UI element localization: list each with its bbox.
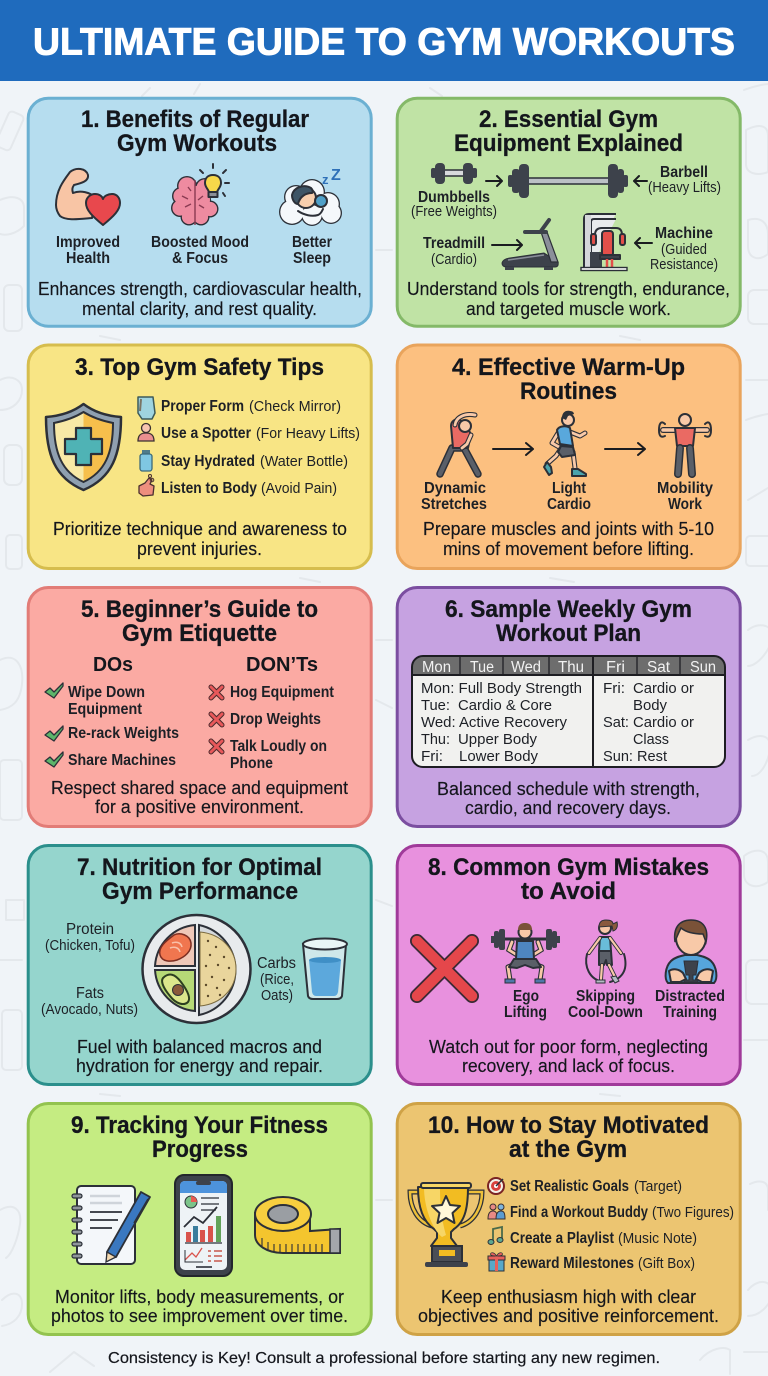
- list: don'ts: Hog Equipment: [230, 684, 334, 701]
- list: dos: Re-rack Weights: [68, 725, 179, 742]
- panel: 6 weekly plan: [397, 588, 740, 826]
- label: carbs: [257, 955, 296, 1004]
- text: etiquette summary: for a positive environment.: [95, 797, 304, 817]
- heading: motivation: at the Gym: [509, 1136, 627, 1163]
- icon: flexed arm with heart: [56, 169, 120, 225]
- label: protein: (Chicken, Tofu): [45, 937, 135, 954]
- label: dumbbells: (Free Weights): [411, 203, 497, 220]
- table: weekly schedule: Tue: [470, 659, 494, 676]
- list: motivation tips: (Music Note): [618, 1230, 697, 1247]
- text: warm-up summary: mins of movement before lifting.: [443, 539, 694, 559]
- panel: 4 warm-up: [397, 345, 740, 568]
- zZ letters: z: [322, 172, 329, 187]
- label: machine: [650, 225, 718, 273]
- heading: weekly plan: Workout Plan: [496, 620, 641, 647]
- panel: 7 nutrition: [28, 846, 371, 1084]
- icon: notebook and pen: [72, 1186, 150, 1264]
- text: benefits summary: mental clarity, and rest quality.: [82, 299, 317, 319]
- table: weekly schedule: Sat: [647, 659, 671, 676]
- icon: trophy: [410, 1183, 482, 1267]
- text: motivation summary: objectives and positive reinforcement.: [418, 1306, 719, 1326]
- labels: mistakes: Skipping: [576, 988, 635, 1005]
- text: plan summary: cardio, and recovery days.: [465, 798, 671, 818]
- list: safety tips: [138, 397, 360, 497]
- table: weekly schedule: Class: [633, 731, 669, 748]
- heading: benefits: Gym Workouts: [117, 130, 277, 157]
- labels: benefits: Better: [292, 234, 332, 251]
- label: carbs: Oats): [261, 987, 293, 1004]
- icon: two figures: [488, 1204, 505, 1219]
- heading: nutrition: [77, 854, 322, 905]
- labels: mistakes: Training: [663, 1004, 717, 1021]
- icon: shield with cross: [46, 404, 121, 490]
- list: motivation tips: Create a Playlist: [510, 1230, 614, 1247]
- heading: weekly plan: 6. Sample Weekly Gym: [445, 596, 692, 623]
- arrow: machine: [635, 238, 652, 248]
- icon: glass of water: [303, 938, 347, 999]
- list: don'ts: Drop Weights: [230, 711, 321, 728]
- table: weekly schedule: Tue:: [421, 697, 450, 714]
- heading: benefits: 1. Benefits of Regular: [81, 106, 309, 133]
- table: weekly schedule: Wed: [511, 659, 541, 676]
- text: nutrition summary: Fuel with balanced macros and: [77, 1037, 322, 1057]
- footer note: Consistency is Key! Consult a professional before starting any new regimen.: [108, 1350, 660, 1367]
- panel: 3 safety: [28, 345, 371, 568]
- title: ULTIMATE GUIDE TO GYM WORKOUTS: [33, 22, 735, 64]
- table: weekly schedule: Fri:: [421, 748, 443, 765]
- labels: benefits: Improved: [56, 234, 120, 251]
- text: tracking summary: photos to see improvement over time.: [51, 1306, 348, 1326]
- table: weekly schedule: Fri:: [603, 680, 625, 697]
- list: motivation tips: Find a Workout Buddy: [510, 1204, 648, 1221]
- text: mistakes summary: recovery, and lack of focus.: [462, 1056, 675, 1076]
- table: weekly schedule: Mon: [422, 659, 451, 676]
- text: motivation summary: [418, 1287, 719, 1326]
- text: safety summary: prevent injuries.: [137, 539, 262, 559]
- text: safety summary: [53, 519, 347, 559]
- table: weekly schedule: Lower Body: [459, 748, 538, 765]
- text: equipment summary: [407, 279, 730, 319]
- labels: warm-up steps: Light: [552, 480, 586, 497]
- text: equipment summary: and targeted muscle work.: [466, 299, 671, 319]
- heading: mistakes: to Avoid: [521, 878, 616, 905]
- icon: target: [488, 1178, 504, 1194]
- text: etiquette summary: [51, 778, 348, 817]
- heading: tracking: Progress: [152, 1136, 248, 1163]
- zZ letters: Z: [331, 167, 341, 184]
- heading: nutrition: Gym Performance: [102, 878, 298, 905]
- list: safety tips: Proper Form: [161, 398, 244, 415]
- icon: runner: [544, 411, 586, 476]
- label: machine: Resistance): [650, 256, 718, 273]
- panel: 9 tracking: [28, 1104, 371, 1334]
- table: weekly schedule: Wed: Active Recovery: [421, 714, 567, 731]
- list: don'ts: Talk Loudly on: [230, 738, 327, 755]
- label: barbell: (Heavy Lifts): [648, 179, 721, 196]
- list: motivation tips: Set Realistic Goals: [510, 1178, 629, 1195]
- labels: warm-up steps: Stretches: [421, 496, 487, 513]
- label: machine: Machine: [655, 225, 713, 242]
- labels: warm-up steps: Work: [668, 496, 702, 513]
- label: protein: [45, 921, 135, 954]
- label: carbs: Carbs: [257, 955, 296, 972]
- icon: barbell: [508, 164, 628, 198]
- label: fats: (Avocado, Nuts): [41, 1001, 138, 1018]
- label: dumbbells: Dumbbells: [418, 189, 490, 206]
- table: weekly schedule: Body: [633, 697, 667, 714]
- heading: mistakes: [428, 854, 709, 905]
- list: safety tips: Listen to Body: [161, 480, 257, 497]
- heading: warm-up: 4. Effective Warm-Up: [452, 354, 685, 381]
- table: weekly schedule: Cardio & Core: [458, 697, 552, 714]
- table: weekly schedule: Thu: [558, 659, 584, 676]
- list: dos: Wipe Down: [68, 684, 145, 701]
- heading: equipment: Equipment Explained: [454, 130, 683, 157]
- icon: phone with charts: [175, 1175, 232, 1276]
- list: motivation tips: (Gift Box): [638, 1255, 695, 1272]
- heading: warm-up: [452, 354, 685, 405]
- label: treadmill: (Cardio): [431, 251, 477, 268]
- label: carbs: (Rice,: [260, 971, 294, 988]
- icon: sleeping person on cloud: [279, 167, 342, 226]
- label: protein: Protein: [66, 921, 114, 938]
- labels: mistakes: Lifting: [504, 1004, 547, 1021]
- icon: cable machine: [581, 214, 627, 270]
- icon: measuring tape: [255, 1197, 340, 1253]
- list: safety tips: Stay Hydrated: [161, 453, 255, 470]
- list: safety tips: (Check Mirror): [249, 398, 341, 415]
- heading: mistakes: 8. Common Gym Mistakes: [428, 854, 709, 881]
- label: dumbbells: [411, 189, 497, 220]
- text: benefits summary: [38, 279, 362, 319]
- arrow: treadmill: [492, 240, 522, 250]
- heading: weekly plan: [445, 596, 692, 647]
- text: safety summary: Prioritize technique and awareness to: [53, 519, 347, 539]
- table: weekly schedule: Mon: Full Body Strength: [421, 680, 582, 697]
- list: safety tips: Use a Spotter: [161, 425, 251, 442]
- icon: mobility figure: [659, 414, 711, 474]
- table: weekly schedule: Thu:: [421, 731, 450, 748]
- label: fats: [41, 985, 138, 1018]
- heading: equipment: [454, 106, 683, 157]
- icon: dynamic stretch figure: [440, 414, 478, 474]
- list: dos: Share Machines: [68, 752, 176, 769]
- text: nutrition summary: [76, 1037, 323, 1076]
- arrow: barbell label: [634, 176, 647, 186]
- labels: benefits: [56, 234, 332, 267]
- text: warm-up summary: [423, 519, 714, 559]
- icon: squatting lifter: [491, 923, 560, 983]
- panel: 8 mistakes: [397, 846, 740, 1084]
- label: treadmill: [423, 235, 485, 268]
- heading: motivation: 10. How to Stay Motivated: [428, 1112, 709, 1139]
- list: don'ts: Phone: [230, 755, 273, 772]
- table: weekly schedule: Fri: [606, 659, 625, 676]
- table: weekly schedule: Sun: Rest: [603, 748, 668, 765]
- icon: balanced plate: [142, 915, 250, 1023]
- table: weekly schedule: Sun: [690, 659, 716, 676]
- labels: benefits: Boosted Mood: [151, 234, 249, 251]
- panel: 10 motivation: [397, 1104, 740, 1334]
- label: machine: (Guided: [661, 241, 707, 258]
- text: nutrition summary: hydration for energy and repair.: [76, 1056, 323, 1076]
- icon: distracted man with phone: [666, 920, 716, 983]
- label: treadmill: Treadmill: [423, 235, 485, 252]
- list: don'ts: [211, 654, 334, 772]
- icon: music note: [488, 1227, 503, 1244]
- label: barbell: [648, 164, 721, 196]
- label: fats: Fats: [76, 985, 104, 1002]
- icon: treadmill: [502, 220, 558, 270]
- labels: warm-up steps: Dynamic: [424, 480, 486, 497]
- icon: body hand: [139, 474, 154, 496]
- list: motivation tips: (Two Figures): [652, 1204, 734, 1221]
- heading: benefits: [81, 106, 309, 157]
- panel: 1 benefits: [28, 98, 371, 326]
- list: safety tips: (For Heavy Lifts): [256, 425, 360, 442]
- heading: etiquette: Gym Etiquette: [122, 620, 277, 647]
- list: dos: DOs: [93, 654, 133, 676]
- heading: etiquette: [81, 596, 318, 647]
- labels: warm-up steps: [421, 480, 713, 513]
- heading: safety: 3. Top Gym Safety Tips: [75, 354, 324, 381]
- heading: motivation: [428, 1112, 709, 1163]
- title banner: [0, 0, 768, 81]
- text: tracking summary: [51, 1287, 348, 1326]
- text: tracking summary: Monitor lifts, body measurements, or: [55, 1287, 344, 1307]
- text: mistakes summary: Watch out for poor form, neglecting: [429, 1037, 708, 1057]
- labels: mistakes: [504, 988, 725, 1021]
- heading: etiquette: 5. Beginner’s Guide to: [81, 596, 318, 623]
- table: weekly schedule: [412, 656, 725, 767]
- text: mistakes summary: [429, 1037, 708, 1076]
- list: dos: Equipment: [68, 701, 142, 718]
- list: dos: [45, 654, 179, 769]
- icon: spotter: [138, 424, 154, 441]
- labels: benefits: Health: [66, 250, 110, 267]
- list: motivation tips: Reward Milestones: [510, 1255, 634, 1272]
- text: warm-up summary: Prepare muscles and joints with 5-10: [423, 519, 714, 539]
- labels: benefits: Sleep: [293, 250, 331, 267]
- list: safety tips: (Avoid Pain): [261, 480, 337, 497]
- text: equipment summary: Understand tools for strength, endurance,: [407, 279, 730, 299]
- panel: 2 equipment: [397, 98, 740, 326]
- table: weekly schedule: Upper Body: [458, 731, 537, 748]
- zZ letters: [322, 167, 341, 187]
- heading: tracking: [71, 1112, 328, 1163]
- labels: warm-up steps: Mobility: [657, 480, 713, 497]
- heading: tracking: 9. Tracking Your Fitness: [71, 1112, 328, 1139]
- text: etiquette summary: Respect shared space and equipment: [51, 778, 348, 798]
- panel: 5 etiquette: [28, 588, 371, 826]
- label: barbell: Barbell: [660, 164, 708, 181]
- labels: benefits: & Focus: [172, 250, 228, 267]
- list: don'ts: DON’Ts: [246, 654, 318, 676]
- text: plan summary: Balanced schedule with strength,: [437, 779, 700, 799]
- text: plan summary: [437, 779, 700, 818]
- arrow: dumbbell to barbell: [486, 176, 502, 186]
- icon: water bottle: [140, 450, 152, 471]
- text: benefits summary: Enhances strength, cardiovascular health,: [38, 279, 362, 299]
- labels: mistakes: Ego: [513, 988, 539, 1005]
- icon: big red X: [417, 941, 472, 996]
- table: weekly schedule: Cardio or: [633, 714, 694, 731]
- text: motivation summary: Keep enthusiasm high with clear: [441, 1287, 696, 1307]
- arrow: cardio to mobility: [605, 443, 645, 455]
- icon: gift box: [488, 1253, 505, 1271]
- list: safety tips: (Water Bottle): [260, 453, 348, 470]
- list: motivation tips: (Target): [634, 1178, 682, 1195]
- icon: mirror: [138, 397, 155, 419]
- labels: warm-up steps: Cardio: [547, 496, 591, 513]
- table: weekly schedule: Cardio or: [633, 680, 694, 697]
- icon: brain with light bulb: [171, 164, 229, 226]
- table: weekly schedule: Sat:: [603, 714, 629, 731]
- arrow: stretches to cardio: [493, 443, 533, 455]
- heading: warm-up: Routines: [520, 378, 617, 405]
- heading: equipment: 2. Essential Gym: [479, 106, 658, 133]
- labels: mistakes: Distracted: [655, 988, 725, 1005]
- icon: jump rope woman: [586, 920, 625, 983]
- list: motivation tips: [488, 1178, 734, 1272]
- heading: nutrition: 7. Nutrition for Optimal: [77, 854, 322, 881]
- icon: dumbbell: [431, 163, 477, 184]
- labels: mistakes: Cool-Down: [568, 1004, 643, 1021]
